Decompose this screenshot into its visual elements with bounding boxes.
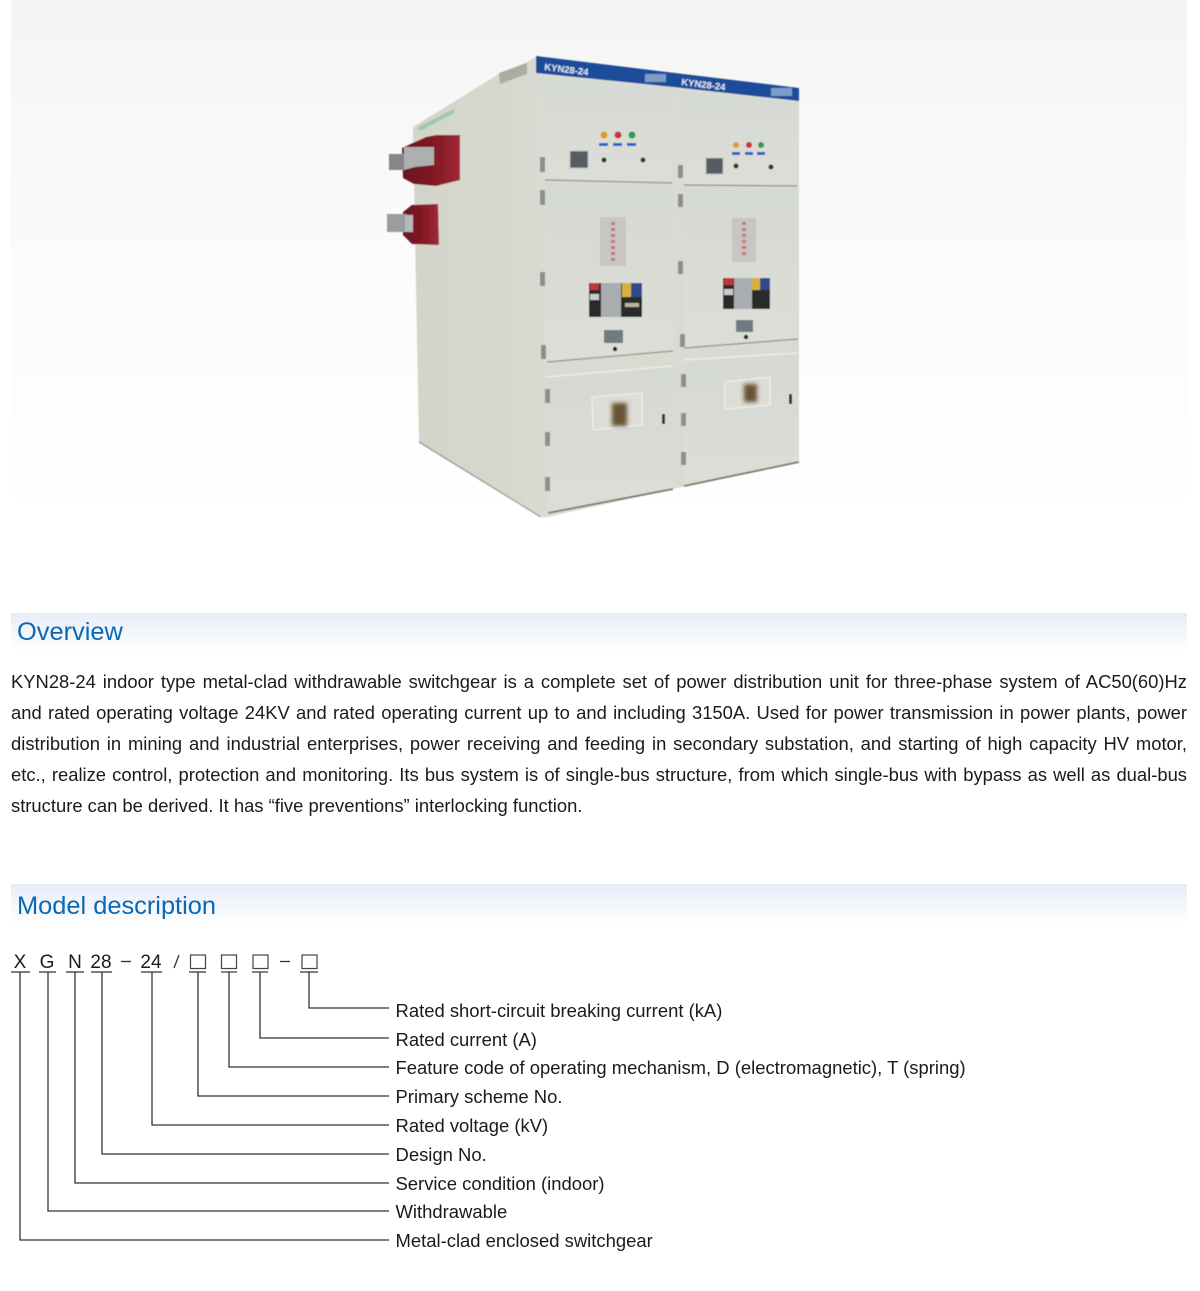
right column upper door [682,92,796,184]
left column middle door [545,183,673,361]
overview paragraph: distribution in mining and industrial enterprises, power receiving and feeding in secondary substation, and starting of high capacity HV motor, [11,733,1187,754]
leader lines [20,972,389,1240]
overview paragraph: etc., realize control, protection and monitoring. Its bus system is of single-bus structure, from which single-bus with bypass as well as dual-bus [11,764,1187,785]
upper busbar insulator [389,135,460,186]
left column lower door [546,366,673,512]
leader labels: Withdrawable [396,1201,507,1222]
leader labels: Rated voltage (kV) [396,1115,548,1136]
model code characters: 28 [90,952,112,973]
leader labels: Rated current (A) [396,1029,537,1050]
leader labels: Metal-clad enclosed switchgear [396,1230,653,1251]
illustration: KYN28-24 switchgear cabinet [386,55,800,518]
section header: Overview: Overview [17,618,123,646]
left column upper door [543,77,673,182]
model code characters: X [14,952,27,973]
leader labels: Rated short-circuit breaking current (kA) [396,1000,722,1021]
indicator lamps and buttons, right [706,142,774,174]
product photo panel [11,0,1187,600]
hinges [540,157,686,491]
overview paragraph: and rated operating voltage 24KV and rated operating current up to and including 3150A. Used for power transmission in power plants, power [11,702,1187,723]
section header: Model description [11,884,1187,924]
leader labels: Design No. [396,1144,487,1165]
cabinet side face [413,57,543,517]
nameplates [600,217,756,266]
separators: dashes and slash [121,955,290,968]
leader labels [396,1000,966,1251]
section header: Overview [11,613,1187,651]
blue top band with labels: KYN28-24 [544,62,590,78]
leader labels: Service condition (indoor) [396,1173,605,1194]
overview paragraph [11,671,1187,816]
lower viewing window, right [725,377,770,409]
placeholder boxes [190,955,317,968]
blue top band with labels: KYN28-24 [681,77,727,93]
small gray plates and locks [604,320,753,351]
contacts seen through viewing windows [612,384,757,426]
overview paragraph: KYN28-24 indoor type metal-clad withdrawable switchgear is a complete set of power distribution unit for three-phase system of AC50(60)Hz [11,671,1187,692]
blue top band with labels [536,56,799,101]
door handles [662,394,792,424]
model code characters: N [68,952,82,973]
cabinet front frame [534,70,799,518]
right column lower door [684,353,799,485]
model code characters: 24 [140,952,162,973]
model code characters [14,952,162,973]
inspection window, left [589,283,642,317]
inspection window, right [723,278,770,309]
model code diagram [11,952,966,1251]
section header: Model description: Model description [17,892,216,920]
model code characters: G [40,952,54,973]
leader labels: Primary scheme No. [396,1086,562,1107]
overview paragraph: structure can be derived. It has “five preventions” interlocking function. [11,795,582,816]
indicator lamps and buttons, left [570,132,646,168]
lower busbar insulator [387,204,439,245]
underlines [11,971,318,973]
lower viewing window, left [592,393,642,430]
door seams and shadows [545,180,799,513]
right column middle door [684,189,798,348]
leader labels: Feature code of operating mechanism, D (electromagnetic), T (spring) [396,1057,966,1078]
